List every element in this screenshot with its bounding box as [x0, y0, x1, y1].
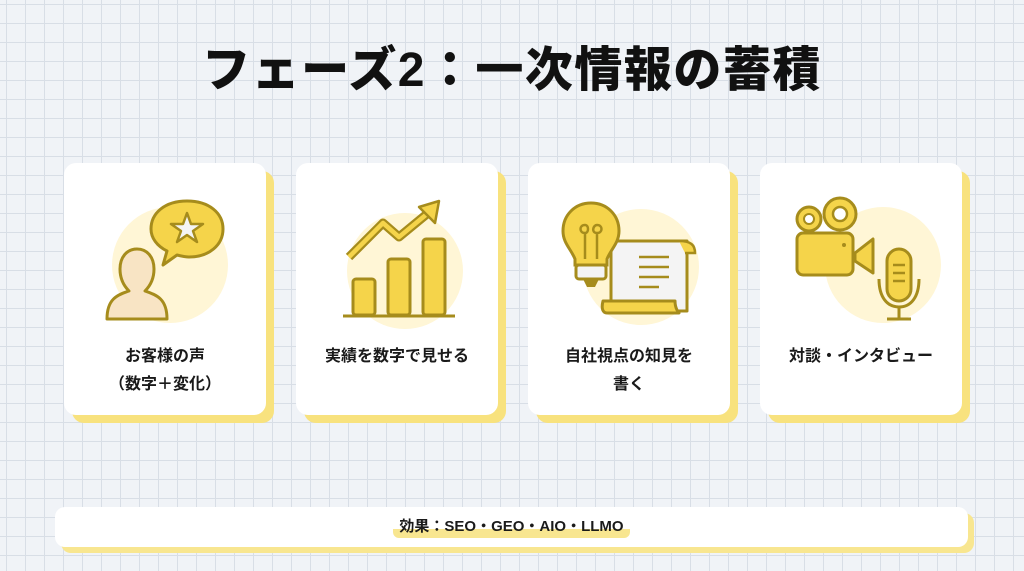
label: 自社視点の知見を [565, 348, 693, 365]
label: （数字＋変化） [109, 376, 221, 393]
icon: bar chart with arrow [343, 200, 463, 329]
icon: person with star speech bubble [106, 200, 228, 323]
label [565, 347, 693, 393]
label: 書く [613, 376, 645, 393]
card: numbers [296, 163, 498, 415]
icon: video camera and microphone [796, 196, 941, 323]
effect text: 効果：SEO・GEO・AIO・LLMO [399, 518, 624, 535]
card: customer voice [64, 163, 266, 415]
label: 対談・インタビュー [789, 348, 933, 365]
label: お客様の声 [125, 348, 205, 365]
card: own insights [528, 163, 730, 415]
effect bar [55, 507, 968, 547]
card: interview [760, 163, 962, 415]
icon: light bulb and scroll [562, 202, 699, 325]
label [109, 347, 221, 393]
title: フェーズ2：一次情報の蓄積 [202, 44, 822, 97]
label: 実績を数字で見せる [325, 348, 469, 365]
